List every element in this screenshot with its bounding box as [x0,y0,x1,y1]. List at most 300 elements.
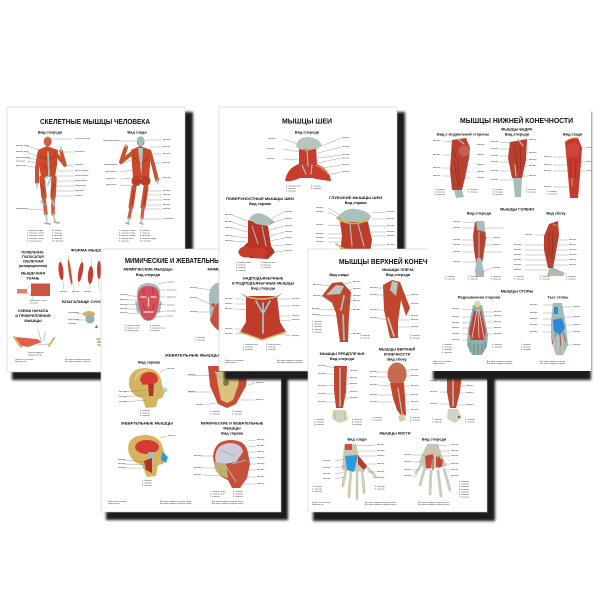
footer: Издательство [108,503,119,505]
arm front labels: мышца [411,315,419,317]
shin front labels: 5. мышца [491,276,502,278]
head legend: 2. мышца шеи [210,494,225,496]
heading: foot muscles: МЫШЦЫ СТОПЫ [501,290,534,294]
heading: medial view: Вид с медиальной стороны [437,132,489,136]
skull 2 labels: мышца [188,374,196,376]
back labels: двуглавая [106,184,117,186]
back labels: трёхглавая [105,171,117,173]
shin front labels: мышца [453,221,461,223]
face labels: круговая [167,296,177,298]
dorsal labels: мышца [573,306,581,308]
hand palm labels: мышца [451,444,459,446]
sheath leaders [76,313,85,320]
forearm right labels: мышца [466,404,474,406]
figure: face front [136,283,161,321]
scheme caption: прикрепление [28,354,43,356]
front legend: 2. мышца голени [27,233,45,235]
arm back labels: 5. мышца [312,331,323,333]
dorsal labels: мышца [573,344,581,346]
head peek leaders [197,288,212,312]
shin side labels: мышца [569,264,577,266]
thigh front labels: мышца [491,141,499,143]
face labels: височная [167,290,177,292]
shin front labels: 1. мышца [445,276,456,278]
skull 1 labels: мышца [167,368,175,370]
heading: hand muscles: МЫШЦЫ КИСТИ [380,432,411,436]
neck legend: 2. мышца [286,188,297,190]
figure: superficial neck [238,213,275,259]
heading: scheme of origin and insertion: И ПРИКРЕПЛЕНИЯ [15,314,51,318]
head legend: 1. мышца лица [210,491,226,493]
hand palm labels: мышца [451,469,459,471]
footer: Плакаты по анатомии [433,361,451,363]
plantar labels: мышца [494,327,502,329]
heading: facial and masticatory muscles: Вид справа [221,432,244,436]
hand back labels: 5. мышца [375,489,386,491]
sheath labels: синовия [68,323,77,325]
title: МЫШЦЫ ВЕРХНЕЙ КОНЕЧНОСТИ [339,257,451,266]
back legend: 6. мышца [140,230,151,232]
hand back labels: 3. мышца [312,491,323,493]
arm back labels: мышца [313,284,321,286]
front legend: 5. мышца шеи [27,240,42,242]
hyoid legend: 3. мышца [243,349,254,351]
back labels: мышца [163,194,171,196]
heading: upper limb lateral: Вид сбоку [387,358,408,362]
deep labels: мышца [387,235,395,237]
forearm labels: 2. мышца [314,422,325,424]
hand palm labels: 5. мышца [459,491,470,493]
neck labels: мышца [268,138,276,140]
face labels: мышца [120,312,128,314]
skull 1 labels: 3. мышца [140,415,151,417]
heading: masticatory muscles top: ЖЕВАТЕЛЬНЫЕ МЫШЦЫ [164,354,219,358]
head labels: мышца [194,455,202,457]
skull 2 labels: 1. мышца [210,411,221,413]
front labels: двуглавая [16,165,27,167]
heading: front view hand: Вид спереди [422,438,447,442]
face labels: щёчная [167,304,176,306]
hyoid legend: 5. мышца [266,347,277,349]
deep leaders [328,208,386,245]
dorsal labels: мышца [530,312,538,314]
back labels: широчайшая [104,163,118,166]
shin side labels: 4. мышца [540,279,551,281]
front labels: портняжная [75,180,88,182]
forearm labels: 3. мышца [314,424,325,426]
poster: facial and masticatory muscles [101,249,288,520]
heading: arm muscles: Вид спереди [386,273,411,277]
forearm right labels: 4. мышца [465,422,476,424]
heading: hyoid muscles: НАДПОДЪЯЗЫЧНЫЕ [243,276,284,280]
back labels: мышца [163,162,171,164]
plantar labels: мышца [494,333,502,335]
thigh medial labels: 5. мышца [468,192,479,194]
footer: Плакаты по анатомии [15,359,33,361]
forearm right labels: мышца [430,380,438,382]
dorsal labels: мышца [530,318,538,320]
hyoid labels: мышца [292,335,300,337]
front labels: белая линия [75,175,89,177]
forearm labels: 4. мышца [352,419,363,421]
front labels: косая мышца [75,170,89,172]
hyoid labels: мышца [292,305,300,307]
footer: Издательство [225,362,236,364]
thigh back labels: мыш [586,147,592,149]
back labels: мышца [163,190,171,192]
skull 2 labels: 2. мышца [210,414,221,416]
hand back labels: 2. мышца [312,489,323,491]
figure: hand back [342,444,376,499]
neck labels: мышца [267,148,275,150]
forearm labels: 5. мышца [352,422,363,424]
heading: striated muscle tissue: СКЕЛЕТНАЯ [23,260,44,264]
skull 1 labels: мышца [119,401,127,403]
forearm labels: 1. мышца [314,419,325,421]
thigh back leaders [553,148,586,187]
figure: arm front [383,280,410,338]
plantar labels: 1. мышца [442,344,453,346]
thigh front labels: мышца [529,159,537,161]
head labels: мышца [257,445,265,447]
thigh back labels: мышца [544,156,552,158]
front labels: мышца шеи [16,151,29,153]
plantar labels: 6. мышца [492,347,503,349]
thigh medial labels: мышца [477,177,485,179]
arm front labels: мышца [370,294,378,296]
back labels: мышца [163,208,171,210]
shin front labels: мышца [453,227,461,229]
hand back labels: 1. мышца [312,486,323,488]
thigh back labels: мыш [586,161,592,163]
hand back labels: мышца [377,471,385,473]
deep labels: мышца [316,211,324,213]
front legend: 4. мышца спины [27,238,44,240]
figure: muscle attachment scheme [14,330,54,347]
skull 1 labels: 2. мышца [140,413,151,415]
footer: Плакаты по анатомии [312,502,330,504]
heading: striated muscle tissue: МЫШЕЧНАЯ [21,272,45,276]
figure: forearm right [447,371,462,423]
shin side labels: 5. мышца [566,276,577,278]
face legend: 6. мышца [150,330,161,332]
arm back labels: мышца [353,309,361,311]
shin front labels: мышца [453,244,461,246]
skull 2 labels: 4. мышца [232,414,243,416]
head peek labels: 2. мышца [195,340,206,342]
figure: muscle forms [58,256,101,290]
lateral labels: мышца [370,384,378,386]
superficial labels: мышца [285,211,293,213]
thigh medial labels: мышца [433,140,441,142]
head labels: мышца [257,439,265,441]
title: МЫШЦЫ НИЖНЕЙ КОНЕЧНОСТИ [460,116,573,125]
heading: forearm muscles: МЫШЦЫ ПРЕДПЛЕЧЬЯ [320,352,365,356]
face labels: мышца [120,299,128,301]
back legend: 2. мышца плеча [119,233,136,235]
footer: Издательство [312,504,323,506]
head labels: мышца [257,451,265,453]
neck legend: 1. мышца шеи [286,186,301,188]
hand back labels: мышца [377,450,385,452]
heading: thigh muscles: МЫШЦЫ БЕДРА [501,128,533,132]
lateral labels: 1. мышца [372,417,383,419]
lateral labels: мышца [411,409,419,411]
hand back labels: мышца [377,444,385,446]
shin side labels: мышца [514,269,522,271]
plantar labels: мышца [452,333,460,335]
thigh medial labels: мышца [477,154,485,156]
footer: Все права защищены издание плакат [365,502,397,504]
figure: arm back [322,282,351,342]
hyoid labels: мышца [292,298,300,300]
back leaders [120,140,162,219]
superficial legend: 5. мышца шеи [261,262,276,264]
superficial legend: 6. мышца [261,265,272,267]
arm back labels: 4. мышца [312,329,323,331]
shin side labels: мышца [514,264,522,266]
front legend: 8. фасция [52,234,63,237]
footer: Все права защищены издание плакат [418,504,450,506]
back labels: мышца [163,146,171,148]
neck labels: мышца [267,158,275,160]
arm back labels: 2. мышца [312,324,323,326]
skull 1 leaders [124,369,166,402]
skull 2 labels: мышца [188,391,196,393]
heading: front view: Вид спереди [38,130,63,134]
skull 2 labels: мышца [196,404,204,406]
shin side labels: 1. мышца [514,276,525,278]
front labels: бедренная [75,185,87,187]
hand palm labels: 7. мышца [459,497,470,499]
superficial labels: мышца [285,231,293,233]
head legend: 4. мышца [233,491,244,493]
arm back labels: мышца [312,314,320,316]
arm back leaders [318,282,352,334]
figure: skull 1 [129,368,167,408]
lateral labels: 4. мышца [410,420,421,422]
arm back labels: мышца [353,288,361,290]
thigh medial labels: мышца [477,171,485,173]
skull 1 labels: 1. мышца [140,410,151,412]
forearm labels: мышца [318,373,326,375]
title: МЫШЦЫ ШЕИ [282,118,332,126]
face legend: 3. мышца рта [125,330,139,332]
heading: plantar side: Подошвенная сторона [458,296,501,300]
face labels: мышца [120,308,128,310]
neck labels: мышца [342,137,350,139]
heading: back view hand: Вид сзади [347,438,367,442]
arm back labels: мышца [313,295,321,297]
thigh back labels: мыш [586,170,592,172]
thigh medial labels: 3. мышца [435,194,446,196]
superficial labels: мышца [285,250,293,252]
arm back labels: 3. мышца [312,326,323,328]
hand palm labels: мышца [451,463,459,465]
deep labels: мышца [387,231,395,233]
forearm right labels: мышца [466,375,474,377]
thigh medial labels: 2. мышца [435,192,446,194]
neck labels: мышца [342,146,350,148]
heading: dorsal side: Тыл стопы [548,296,568,300]
thigh medial leaders [443,141,470,178]
skull 2 labels: мышца [256,382,264,384]
heading: forearm muscles: Вид спереди [330,357,355,361]
plantar labels: мышца [494,311,502,313]
forearm labels: мышца [350,397,358,399]
plantar labels: 4. мышца [442,352,453,354]
back labels: сухожилие [163,218,175,220]
thigh front labels: 4. мышца [526,189,537,191]
hyoid legend: 1. мышца шеи [243,344,258,346]
footer: Все права защищены издание плакат [365,504,397,506]
hand palm labels: 4. мышца [459,489,470,491]
deep labels: мышца [387,225,395,227]
lateral labels: мышца [370,401,378,403]
hyoid labels: мышца [225,308,233,310]
front labels: лучевая [75,164,84,166]
front labels: большая [16,160,26,162]
figure: muscle tissue [17,284,50,300]
front legend: 10. фасция [52,239,64,242]
arm front labels: 2. мышца [360,338,371,340]
back labels: мышца [163,139,171,141]
forearm labels: мышца [350,391,358,393]
thigh back labels: 2. мышца [547,194,558,196]
figure: tendon sheath [83,311,100,345]
heading: front view: Вид спереди [136,273,161,277]
forms caption: мышца [84,291,92,293]
heading: right view: Вид справа [249,202,272,206]
arm front labels: мышца [411,294,419,296]
back legend: 10. мышца [140,240,152,242]
thigh back labels: мышца [544,164,552,166]
arm back labels: мышца [353,281,361,283]
hyoid legend: 4. мышца шеи [266,344,281,346]
arm back labels: мышца [353,295,361,297]
hyoid legend: 2. мышца [243,347,254,349]
heading: muscle forms: ФОРМА МЫШЦ [71,248,103,252]
dorsal labels: мышца [530,304,538,306]
shin side labels: мышца [569,254,577,256]
plantar labels: мышца [452,327,460,329]
heading: striated muscle tissue: ПОПЕРЕЧНО- [22,250,44,254]
arm front labels: мышца [370,287,378,289]
thigh front labels: мышца [491,148,499,150]
footer: Все права защищены издание [540,361,565,363]
deep labels: мышца [387,244,395,246]
hand palm labels: мышца [451,455,459,457]
shin front labels: мышца [493,237,501,239]
forms caption: мышца [72,291,80,293]
neck legend: 4. мышца [311,186,322,188]
shin side labels: мышца [525,234,533,236]
hand back labels: мышца [323,460,331,462]
plantar leaders [462,309,493,340]
footer: Все права защищены издание [540,363,565,365]
hyoid leaders [235,299,291,336]
heading: facial muscles front: МИМИЧЕСКИЕ МЫШЦЫ [124,268,173,272]
heading: masticatory muscles bottom: ЖЕВАТЕЛЬНЫЕ МЫШЦЫ [120,422,173,426]
thigh front labels: мышца [491,155,499,157]
forearm labels: мышца [318,401,326,403]
thigh front labels: мышца [529,152,537,154]
figure: thigh back [565,138,582,198]
sheath labels: влагалище [68,319,80,321]
heading: right view: Вид справа [138,360,161,364]
plantar labels: мышца [494,315,502,317]
shin front labels: 4. мышца [468,279,479,281]
back legend: 7. мышца [140,233,151,235]
heading: striated muscle tissue: ПОЛОСАТАЯ [22,255,44,259]
back labels: мышца [163,153,171,155]
front labels: мышца лица [16,145,30,147]
heading: facial and masticatory muscles: МЫШЦЫ [223,426,241,430]
arm front labels: мышца [370,309,378,311]
figure: arm lateral [388,362,406,422]
thigh medial labels: 4. мышца [468,189,479,191]
hand palm labels: 1. мышца [459,481,470,483]
face leaders [127,282,166,317]
title: СКЕЛЕТНЫЕ МЫШЦЫ ЧЕЛОВЕКА [40,119,150,126]
footer: Плакаты по анатомии [108,501,126,503]
forearm right labels: 2. мышца [432,422,443,424]
figure: hyoid neck [240,294,286,340]
scheme caption: начало мышцы [28,352,44,354]
footer: Все права защищены издание [65,359,90,361]
hyoid legend: 6. мышца [266,349,277,351]
head leaders [201,440,256,484]
forearm labels: мышца [318,365,326,367]
superficial labels: мышца [225,221,233,223]
neck labels: мышца [342,171,350,173]
heading: side view: Вид сбоку [546,212,567,216]
skull 1 labels: мышца [119,396,127,398]
hyoid labels: мышца [225,333,233,335]
heading: shin muscles: МЫШЦЫ ГОЛЕНИ [500,208,534,212]
shin front labels: мышца [453,251,461,253]
hyoid labels: мышца [225,328,233,330]
shin side labels: мышца [569,244,577,246]
thigh medial labels: мышца [433,175,441,177]
shin side labels: мышца [514,259,522,261]
lateral labels: мышца [411,385,419,387]
neck legend: 5. мышца [311,188,322,190]
footer: Все права защищены издание плакат [160,503,192,505]
heading: back view: Вид сзади [127,130,147,134]
thigh medial labels: мышца [477,164,485,166]
head labels: мышца [257,483,265,485]
dorsal labels: мышца [573,324,581,326]
thigh front labels: мышца [529,139,537,141]
thigh back labels: мышца [544,186,552,188]
superficial labels: мышца [225,227,233,229]
figure: head dissection [213,440,250,488]
footer: Издательство [433,363,444,365]
skull 3 labels: мышца [118,463,126,465]
figure: dorsal foot [551,303,568,355]
dorsal labels: мышца [530,331,538,333]
skull 1 labels: мышца [119,391,127,393]
thigh back labels: 1. мышца [547,191,558,193]
heading: scheme of origin and insertion: СХЕМА НАЧАЛА [18,309,49,313]
thigh front labels: мышца [529,175,537,177]
footer: Все права защищены издание [277,362,302,364]
back labels: трапециевидная [103,140,121,142]
hand palm labels: 2. мышца [459,484,470,486]
hand palm labels: 3. мышца [459,486,470,488]
hand back labels: мышца [323,473,331,475]
